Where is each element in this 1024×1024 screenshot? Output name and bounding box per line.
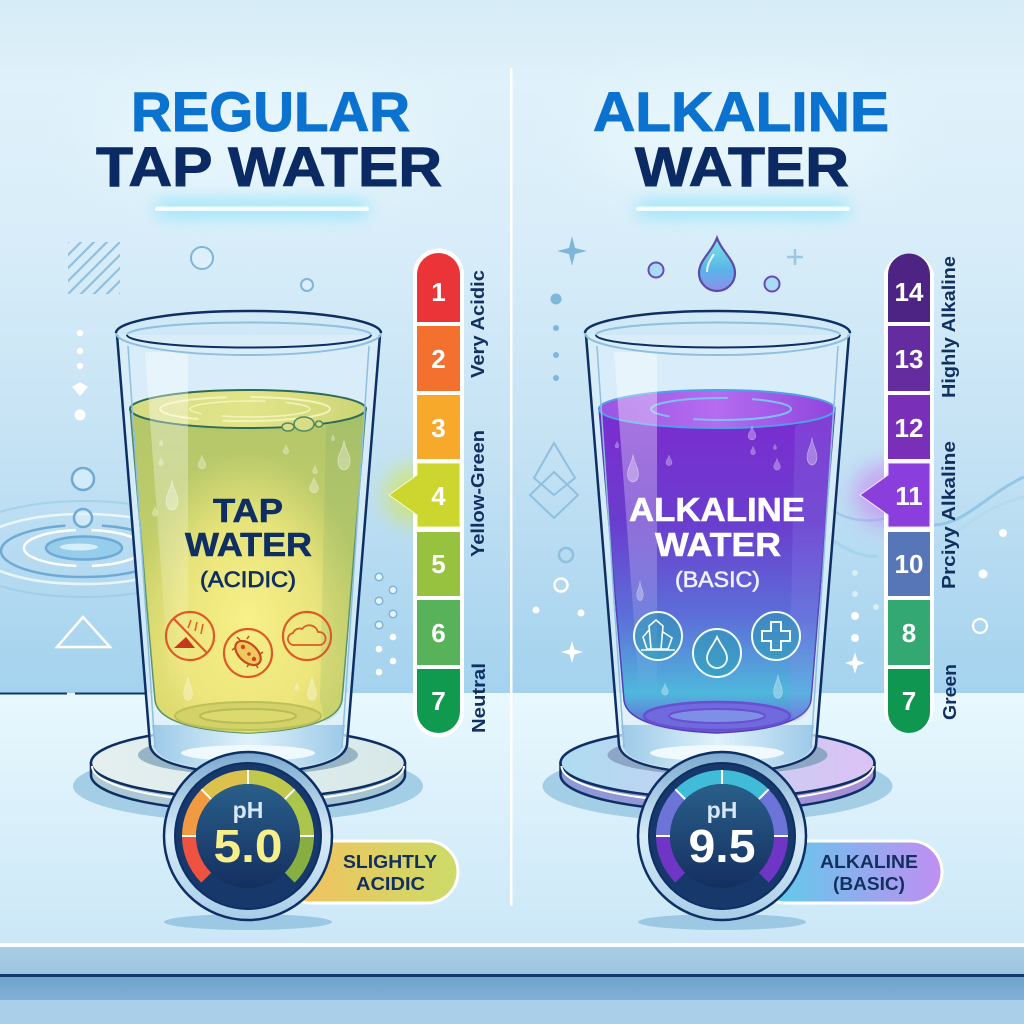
callout: slightly acidic [280,841,458,903]
segment pH 4 with pointer: 4 [431,481,446,511]
decorative flowing waves [832,477,1024,556]
title glow [95,85,900,195]
segment pH 7 [417,669,460,733]
segment pH 8: 8 [902,618,916,648]
scale labels: alkaline side [939,256,960,720]
droplets [615,426,817,698]
glass base [152,725,345,771]
droplets [152,434,350,700]
glass label: tap water: WATER [185,526,312,563]
segment pH 6 [417,600,460,665]
segment pH 2: 2 [431,344,446,374]
segment pH 1: 1 [431,277,446,307]
heading: regular tap water: TAP WATER [96,135,442,198]
pH scale: acidic side [384,248,464,738]
water surface [130,390,366,431]
scale labels: acidic side [468,270,489,733]
segment pH 10: 10 [895,549,923,579]
water body: yellow-green [130,408,366,733]
segment pH 5 [417,532,460,596]
gauge: pH 9.5: pH [707,797,737,823]
coaster: right [542,728,892,822]
callout: alkaline basic: (BASIC) [833,873,905,894]
decorations: left panel [54,242,398,676]
bubble trio and droplet icon above alkaline glass [648,238,780,292]
gauge shadow: left [164,914,332,930]
segment pH 13: 13 [895,344,923,374]
gauge: pH 9.5: 9.5 [688,820,756,872]
segment pH 14 [888,254,930,322]
glass label: alkaline water: WATER [655,526,781,563]
segment pH 7: 7 [902,686,916,716]
glass label: tap water: TAP [213,492,283,529]
glass base [621,725,814,771]
segment pH 3: 3 [431,413,446,443]
segment pH 4 with pointer [389,463,460,527]
scale labels: alkaline side: Highly Alkaline [939,256,959,398]
segment pH 12: 12 [895,413,923,443]
glass label: tap water: (ACIDIC) [200,567,296,592]
gauge: pH 9.5 [638,752,806,920]
segment pH 12 [888,395,930,459]
icon: cloud [283,612,331,660]
icon: water drop [693,629,741,677]
gauge shadow: right [638,914,806,930]
water ripple with falling bubbles [0,466,136,598]
heading: regular tap water [96,80,442,198]
icons: contaminants [166,612,331,677]
glass highlight [614,352,657,690]
segment pH 8 [888,600,930,665]
heading: alkaline water: WATER [635,135,849,198]
water body: purple to teal [599,408,835,733]
glass label: alkaline water: (BASIC) [675,567,760,592]
glass outline [585,311,850,774]
heading: alkaline water [593,80,889,198]
segment pH 5: 5 [431,549,446,579]
underline: right heading [636,200,850,218]
glass label: alkaline water [629,491,805,592]
scale labels: acidic side: Neutral [469,663,489,733]
glass outline [116,311,381,774]
segment pH 13 [888,326,930,391]
glass: alkaline water [585,311,850,774]
callout: slightly acidic: SLIGHTLY [343,851,438,872]
gauge: pH 5.0 [164,752,332,920]
scale labels: acidic side: Yellow-Green [468,430,488,557]
heading: regular tap water: REGULAR [131,80,410,143]
segment pH 1 [417,253,460,322]
callout: alkaline basic [755,841,942,903]
icon: sediment crossed out [166,612,214,660]
underline: left heading [155,200,369,218]
segment pH 2 [417,326,460,391]
scale labels: alkaline side: Green [940,664,960,720]
center divider [510,68,512,906]
segment pH 7 [888,669,930,733]
water surface [599,390,835,428]
segment pH 14: 14 [895,277,924,307]
table surface [0,693,1024,1024]
icons: minerals, drop, health [634,612,800,677]
glass label: alkaline water: ALKALINE [629,491,805,528]
heading: alkaline water: ALKALINE [593,80,889,143]
segment pH 3 [417,395,460,459]
callout: alkaline basic: ALKALINE [820,851,918,872]
coaster: left [73,728,423,822]
callout: slightly acidic: ACIDIC [356,873,425,894]
background wall [0,0,1024,694]
glass: tap water [116,311,381,774]
segment pH 6: 6 [431,618,446,648]
segment pH 7: 7 [431,686,446,716]
decorations: right panel [530,236,1007,674]
gauge: pH 5.0: 5.0 [214,820,282,872]
scale labels: acidic side: Very Acidic [468,270,488,378]
icon: bacteria [224,629,272,677]
segment pH 11 with pointer: 11 [895,481,923,511]
glass highlight [145,352,188,690]
glass label: tap water [185,492,312,592]
segment pH 10 [888,532,930,596]
segment pH 11 with pointer [860,463,930,527]
gauge: pH 5.0: pH [233,797,263,823]
icon: health cross [752,612,800,660]
pH scale: alkaline side [853,254,934,733]
icon: crystals [634,612,682,660]
scale labels: alkaline side: Prciyy Alkaline [939,441,959,589]
